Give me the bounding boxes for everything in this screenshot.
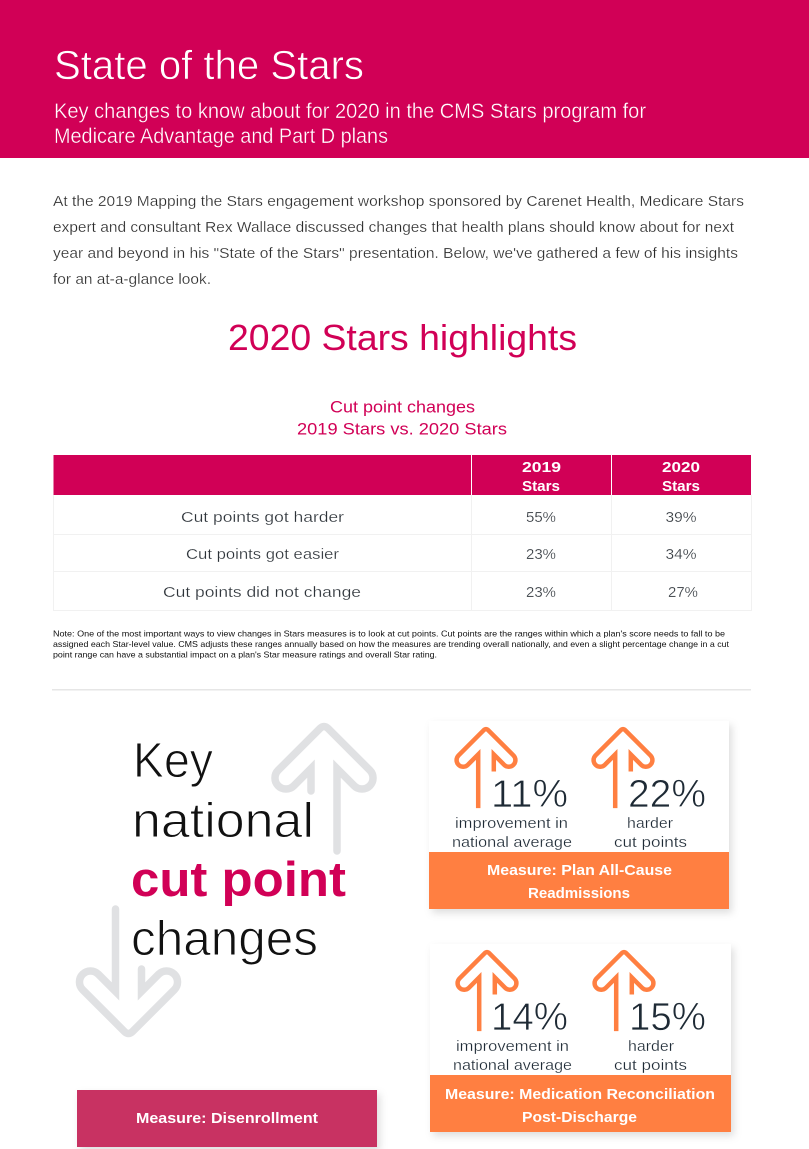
intro paragraph — [53, 194, 744, 288]
table header row: 2019 — [522, 460, 561, 476]
row: easier: 23% — [526, 547, 556, 563]
label: harder cut points — [614, 1039, 687, 1074]
table note — [53, 628, 730, 660]
row: did not change — [163, 585, 698, 601]
row: easier: 34% — [666, 547, 697, 563]
row: harder — [181, 510, 697, 526]
heading: key national cut point changes — [131, 734, 346, 966]
intro paragraph: expert and consultant Rex Wallace discussed changes that health plans should know about for next — [53, 220, 734, 236]
icon: grey down arrow — [79, 909, 178, 1034]
label: improvement in national average — [453, 1039, 572, 1074]
row: easier: Cut points got easier — [186, 547, 339, 563]
heading: key national cut point changes: cut point — [131, 853, 346, 907]
header banner — [0, 0, 809, 158]
stat: 15%: 15% — [629, 996, 706, 1039]
heading: key national cut point changes: Key — [133, 734, 213, 788]
intro paragraph: year and beyond in his "State of the Stars" presentation. Below, we've gathered a few of his insights — [53, 246, 738, 262]
measure bar: plan all-cause readmissions — [429, 852, 729, 909]
table heading: 2019 Stars vs. 2020 Stars — [297, 420, 507, 438]
measure bar: medication reconciliation post-discharge: Post-Discharge — [522, 1109, 637, 1126]
label: harder cut points: cut points — [614, 1058, 687, 1074]
table header row — [54, 455, 751, 495]
measure bar: disenrollment: Measure: Disenrollment — [136, 1110, 318, 1127]
stat: 14%: 14% — [491, 996, 568, 1039]
row: easier — [186, 547, 697, 563]
measure bar: plan all-cause readmissions: Measure: Plan All-Cause — [487, 862, 672, 879]
icon: orange arrow — [458, 952, 516, 1031]
subtitle: Medicare Advantage and Part D plans — [54, 124, 388, 148]
panel: medication reconciliation post-discharge — [430, 944, 731, 1132]
label: harder cut points — [614, 816, 687, 851]
row: did not change: 23% — [526, 585, 556, 601]
table note: Note: One of the most important ways to view changes in Stars measures is to look at cut points. Cut points are the ranges within which a plan's score needs to fall to be — [53, 628, 725, 638]
table: cut point changes — [53, 455, 752, 611]
heading: key national cut point changes: national — [132, 794, 314, 848]
table header row: 2020 — [662, 460, 700, 476]
table heading — [297, 398, 507, 438]
label: improvement in national average: national average — [453, 1058, 572, 1074]
row: harder: Cut points got harder — [181, 510, 344, 526]
row: harder: 39% — [666, 510, 697, 526]
stat: 22%: 22% — [628, 773, 706, 816]
measure bar: medication reconciliation post-discharge: Measure: Medication Reconciliation — [445, 1086, 715, 1103]
intro paragraph: for an at-a-glance look. — [53, 272, 211, 288]
table note: point range can have a substantial impact on a plan's Star measure ratings and overall Star rating. — [53, 650, 437, 660]
measure bar: disenrollment — [77, 1090, 377, 1147]
measure bar: plan all-cause readmissions: Readmissions — [528, 885, 630, 902]
label: harder cut points: harder — [627, 816, 673, 832]
table header row: Stars — [662, 479, 700, 495]
row: harder: 55% — [526, 510, 556, 526]
panel: plan all-cause readmissions — [429, 721, 729, 909]
label: harder cut points: harder — [628, 1039, 674, 1055]
label: improvement in national average — [452, 816, 572, 851]
icon: grey up arrow — [275, 726, 373, 851]
row: did not change: 27% — [668, 585, 698, 601]
row: did not change: Cut points did not change — [163, 585, 361, 601]
subtitle — [54, 99, 646, 148]
table heading: Cut point changes — [330, 398, 475, 416]
subtitle: Key changes to know about for 2020 in the CMS Stars program for — [54, 99, 646, 123]
label: improvement in national average: improvement in — [456, 1039, 569, 1055]
icon: orange arrow — [595, 952, 653, 1031]
table note: assigned each Star-level value. CMS adjusts these ranges annually based on how the measures are trending overall nationally, and even a slight percentage change in a cut — [53, 639, 730, 649]
intro paragraph: At the 2019 Mapping the Stars engagement workshop sponsored by Carenet Health, Medicare Stars — [53, 194, 744, 210]
table header row: Stars — [522, 479, 560, 495]
stat: 11%: 11% — [491, 773, 568, 816]
label: harder cut points: cut points — [614, 835, 687, 851]
label: improvement in national average: improvement in — [455, 816, 568, 832]
icon: orange arrow — [594, 729, 652, 808]
icon: orange arrow — [457, 729, 515, 808]
label: improvement in national average: national average — [452, 835, 572, 851]
title: State of the Stars — [54, 42, 364, 88]
measure bar: medication reconciliation post-discharge — [430, 1075, 731, 1132]
heading: 2020 Stars highlights: 2020 Stars highlights — [228, 317, 577, 358]
heading: key national cut point changes: changes — [131, 912, 318, 966]
